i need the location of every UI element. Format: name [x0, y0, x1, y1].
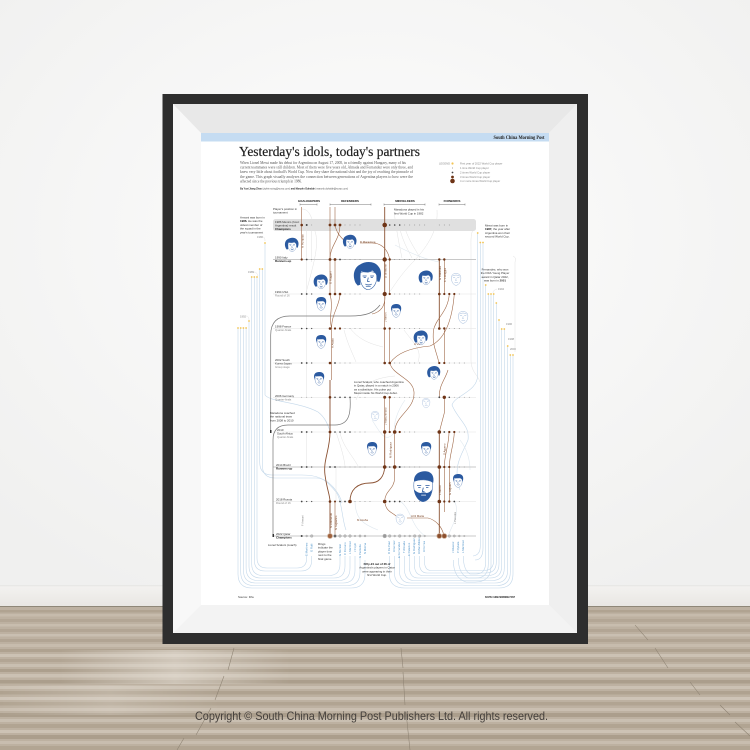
- annotation: rings: Rings: [318, 542, 326, 546]
- position headers: [298, 199, 465, 206]
- 2022 squad name labels: A Correa: [422, 541, 426, 552]
- header band: South China Morning Post: [494, 135, 545, 141]
- portrait: Di Maria: [396, 514, 404, 524]
- annotation: rings: player time: [318, 549, 333, 553]
- portrait: Caniggia: [451, 274, 461, 285]
- annotation: first-timers: Fifty-24 out of 26 of: [364, 562, 390, 566]
- header band: [201, 133, 549, 142]
- legend: 2 times World Cup player: [460, 170, 490, 174]
- portrait: Crespo: [458, 312, 468, 323]
- world cup row labels: Runners-up: [276, 466, 292, 470]
- world cup row labels: Korea-Japan: [275, 362, 292, 366]
- portrait: Batistuta: [419, 270, 433, 285]
- world cup row labels: South Africa: [277, 432, 293, 436]
- debut-year markers: 1989: [248, 270, 254, 274]
- annotation: Maradona coached: [270, 411, 295, 422]
- wooden floor: [0, 607, 750, 750]
- portrait: Aguero: [421, 442, 431, 455]
- byline: By Yuxi Jiang Zhao (yiphie.suing@scmp.com) and Marcelo Duhalde (marcelo.duhalde@scmp.com): [240, 186, 348, 190]
- 2022 squad name labels: R De Paul: [387, 541, 391, 554]
- 2022 squad name labels: E Martinez: [304, 542, 308, 556]
- portrait: Riquelme: [427, 366, 440, 379]
- historic player name labels: N Otamendi: [329, 513, 333, 528]
- row guide lines: [273, 225, 476, 536]
- world cup row labels: Quarter-finals: [275, 328, 292, 332]
- 2022 squad name labels: A Gomez: [392, 540, 396, 552]
- highlighted 1986 band: [273, 219, 476, 231]
- annotation: Maradona coached: the national team: [270, 415, 293, 419]
- legend: 4 or more times World Cup player: [460, 179, 500, 183]
- historic player name labels: R Ayala: [330, 338, 334, 348]
- position headers: FORWARDS: [444, 199, 460, 203]
- historic player name labels: A Villa: [414, 342, 422, 346]
- picture frame: [162, 94, 588, 644]
- annotation: Scaloni played in 2006: Lionel Scaloni, who coached Argentina: [354, 380, 404, 384]
- annotation: first-timers: Argentina's players in Qatar: [359, 566, 395, 570]
- legend: LEGEND: [439, 162, 450, 166]
- historic player name labels: [300, 234, 457, 530]
- world cup row labels: Champions: [275, 227, 291, 231]
- annotation: Maradona coached: from 2008 to 2010: [270, 418, 294, 422]
- world cup row labels: 2010: [277, 428, 284, 432]
- intro text: affected since the previous triumph in 1986.: [240, 179, 302, 183]
- annotation: Armani birth: oldest member of: [240, 223, 263, 227]
- annotation: Armani birth: the squad in the: [240, 227, 261, 231]
- faint connector curves: [302, 209, 480, 536]
- portrait: Simeone: [316, 297, 326, 310]
- annotation: rings: indicate the: [318, 546, 333, 550]
- annotation: young player award: the FIFA Young Player: [481, 271, 509, 275]
- 2022 squad name labels: L Martinez: [348, 540, 352, 554]
- annotation: Armani birth: [240, 216, 265, 234]
- annotation: rings: [318, 542, 333, 561]
- Maradona coach line: [271, 305, 380, 432]
- portrait: young Maradona: [343, 235, 357, 249]
- world cup row labels: 2022 Qatar: [276, 532, 291, 536]
- annotation: Maradona first world cup: Maradona played in his: [394, 208, 424, 212]
- world cup row labels: 2006 Germany: [275, 394, 295, 398]
- portrait: Lautaro: [453, 474, 463, 487]
- portrait: Pumpido: [285, 238, 299, 252]
- historic player name labels: O Ruggeri: [328, 271, 332, 284]
- annotation: Armani birth: year's tournament: [240, 230, 263, 234]
- historic player name labels: J Mascherano: [384, 407, 388, 425]
- 2022 squad name labels: L Martinez: [461, 539, 465, 553]
- historic player name labels: D Maradona: [360, 240, 376, 244]
- debut-year markers: 2000: [510, 347, 516, 351]
- row 2006 dots: [302, 396, 471, 399]
- world cup row labels: 2002 South: [275, 358, 290, 362]
- annotation: young player award: Fernandez, who won: [482, 268, 509, 272]
- intro text: [240, 161, 414, 183]
- world cup row labels: Quarter-finals: [277, 435, 294, 439]
- portrait: Ruggeri: [314, 274, 328, 289]
- portrait: Scaloni: [371, 411, 379, 421]
- annotation: rings: next to the: [318, 553, 332, 557]
- annotation: Scaloni played in 2006: Messi inside his World Cup debut.: [354, 391, 398, 395]
- coach markers: [268, 430, 296, 547]
- row 2022 dots with rings: [301, 534, 465, 538]
- intro text: When Lionel Messi made his debut for Argentina on August 17, 2005, in a friendly against Hungary, many of his: [240, 161, 406, 166]
- annotation: player position: Player's position in: [273, 207, 297, 211]
- debut-year markers: 1998: [508, 337, 514, 341]
- world cup row labels: Champions: [276, 536, 292, 540]
- legend: [439, 162, 502, 183]
- 2022 squad name labels: E Palacios: [407, 542, 411, 556]
- world cup row labels: 1986 Mexico (host:: [275, 220, 300, 224]
- annotation: player position: [273, 207, 297, 214]
- annotation: Scaloni played in 2006: as a substitute. His pulse put: [354, 387, 391, 391]
- world cup row labels: Round of 16: [276, 501, 291, 505]
- right career lines: [389, 233, 513, 588]
- annotation: Scaloni played in 2006: in Qatar, played in a match in 2006: [354, 384, 399, 388]
- coach markers: Lionel Scaloni (coach): [268, 543, 296, 547]
- world cup row labels: 2018 Russia: [276, 498, 292, 502]
- historic player name labels: C Caniggia: [443, 268, 447, 282]
- left career lines: [238, 243, 365, 588]
- historic player name labels: S Aguero: [442, 443, 446, 455]
- intro text: the game. This graph visually analyses the connection between generations of Argentina players to how were the: [240, 175, 413, 179]
- annotation: Messi birth: 1987, the year after: [485, 227, 510, 231]
- position headers: MIDFIELDERS: [395, 199, 415, 203]
- 2022 squad name labels: N Molina: [363, 543, 367, 554]
- world cup row labels: Group stage: [275, 365, 290, 369]
- historic player name labels: N Pumpido: [300, 234, 304, 248]
- 2022 squad name labels: J Alvarez: [451, 541, 455, 553]
- world cup row labels: Quarter-finals: [275, 398, 292, 402]
- legend: 3 times World Cup player: [460, 175, 490, 179]
- row 1994 dots: [301, 292, 460, 296]
- portrait: Messi large: [414, 471, 434, 502]
- historic player name labels: L Messi: [438, 485, 442, 495]
- historic player name labels: M Rodriguez: [388, 442, 392, 458]
- row 1986 dots: [300, 223, 451, 227]
- portrait: Ortega: [391, 304, 401, 317]
- portrait: Ayala: [316, 335, 326, 348]
- annotation: Messi birth: Argentina won their: [485, 231, 510, 235]
- 2022 squad name labels: C Romero: [343, 542, 347, 555]
- annotation: Messi birth: second World Cup.: [485, 235, 510, 239]
- portrait: Veron: [414, 330, 428, 345]
- Scaloni coach line: [273, 397, 350, 536]
- 2022 squad name labels: E Fernandez: [397, 541, 401, 558]
- legend: First year of 2022 World Cup player: [460, 162, 502, 166]
- annotation: first-timers: were appearing in their: [362, 569, 392, 573]
- annotation: Maradona first world cup: [394, 208, 424, 216]
- debut-year markers: 1992: [240, 314, 246, 318]
- 2022 squad name labels: G Pezzella: [358, 544, 362, 558]
- annotation: young player award: [481, 268, 509, 283]
- source note: Source: Fifa: [238, 595, 254, 599]
- annotation: rings: final game.: [318, 557, 332, 561]
- row 2018 dots: [301, 500, 460, 503]
- title: Yesterday's idols, today's partners: [239, 144, 420, 159]
- annotation: Scaloni played in 2006: [354, 380, 404, 395]
- player career lines: [302, 207, 454, 536]
- footer credit: SOUTH CHINA MORNING POST: [485, 595, 515, 599]
- 2022 squad name labels: G Rodriguez: [412, 538, 416, 554]
- world cup row labels: Runners-up: [275, 259, 291, 263]
- 2022 squad name labels: P Dybala: [456, 541, 460, 553]
- row 1998 dots: [301, 327, 460, 330]
- annotation: Maradona first world cup: first World Cup in 1982: [394, 212, 424, 216]
- historic player name labels: L Paredes: [453, 511, 457, 524]
- 2022 squad name labels: G Montiel: [338, 544, 342, 556]
- annotation: Messi birth: Messi was born in: [485, 224, 509, 228]
- historic player name labels: M Acuña: [357, 518, 368, 522]
- intro text: knew very little about football's World Cup. Now they share the national shirt and the joy of reaching the pinnacle of: [240, 170, 414, 174]
- annotation: Messi birth: [485, 224, 510, 239]
- annotation: Armani birth: Armani was born in: [240, 216, 265, 220]
- 2022 squad name labels: A Mac Allister: [417, 537, 421, 554]
- world cup row labels: Round of 16: [275, 294, 290, 298]
- portrait: Maradona large: [354, 262, 381, 290]
- row 2002 dots: [301, 362, 466, 364]
- annotation: young player award: award in Qatar 2022,: [482, 275, 509, 279]
- historic player name labels: A Di Maria: [411, 514, 424, 518]
- poster sheet: [201, 133, 549, 605]
- copyright line: Copyright © South China Morning Post Publishers Ltd. All rights reserved.: [195, 709, 548, 723]
- annotation: Maradona coached: Maradona coached: [270, 411, 295, 415]
- historic player name labels: N Tagliafico: [334, 515, 338, 530]
- world cup row labels: [275, 220, 300, 540]
- 2022 squad name labels: G Rulli: [310, 543, 314, 552]
- historic player name labels: J Veron: [384, 312, 388, 322]
- annotation: young player award: was born in 2001: [484, 279, 506, 283]
- annotation: first-timers: [359, 562, 395, 577]
- world cup row labels: 1990 Italy: [275, 256, 288, 260]
- annotation: first-timers: first World Cup.: [367, 573, 387, 577]
- wall background: [0, 0, 750, 586]
- legend: 1 time World Cup player: [460, 166, 489, 170]
- row 2010 dots: [301, 430, 466, 434]
- annotation: player position: tournament: [273, 210, 288, 214]
- annotation: Armani birth: 1986. He was the: [240, 219, 263, 223]
- portrait: Rodriguez: [367, 442, 377, 455]
- debut-year markers: 1994: [498, 287, 504, 291]
- historic player name labels: G Batistuta: [438, 266, 442, 280]
- position headers: DEFENDERS: [341, 199, 359, 203]
- position headers: GOALKEEPERS: [298, 199, 320, 203]
- historic player name labels: F Armani: [300, 515, 304, 526]
- debut-year markers: 1996: [506, 322, 512, 326]
- intro text: current teammates were still children. Most of them were five years old, Almada and Fernandez were only three, and: [240, 166, 413, 171]
- historic player name labels: G Higuain: [448, 482, 452, 495]
- world cup row labels: 1994 USA: [275, 290, 288, 294]
- 2022 squad name labels: T Almada: [402, 541, 406, 553]
- historic player name labels: D Simeone: [384, 264, 388, 278]
- world cup row labels: 1998 France: [275, 324, 292, 328]
- portrait: Heinze: [314, 372, 324, 385]
- 2022 squad name labels: [304, 537, 465, 558]
- portraits: [285, 235, 468, 524]
- 2022 squad name labels: J Foyth: [353, 542, 357, 552]
- debut-year markers: [237, 232, 516, 356]
- row 1990 dots: [301, 257, 445, 262]
- portrait: Tevez: [422, 398, 430, 408]
- row 2014 dots: [301, 465, 466, 469]
- baseboard: [0, 586, 750, 607]
- world cup row labels: 2014 Brazil: [276, 463, 291, 467]
- world cup row labels: Argentina) result: [275, 224, 296, 228]
- debut-year markers: 1986: [257, 235, 263, 239]
